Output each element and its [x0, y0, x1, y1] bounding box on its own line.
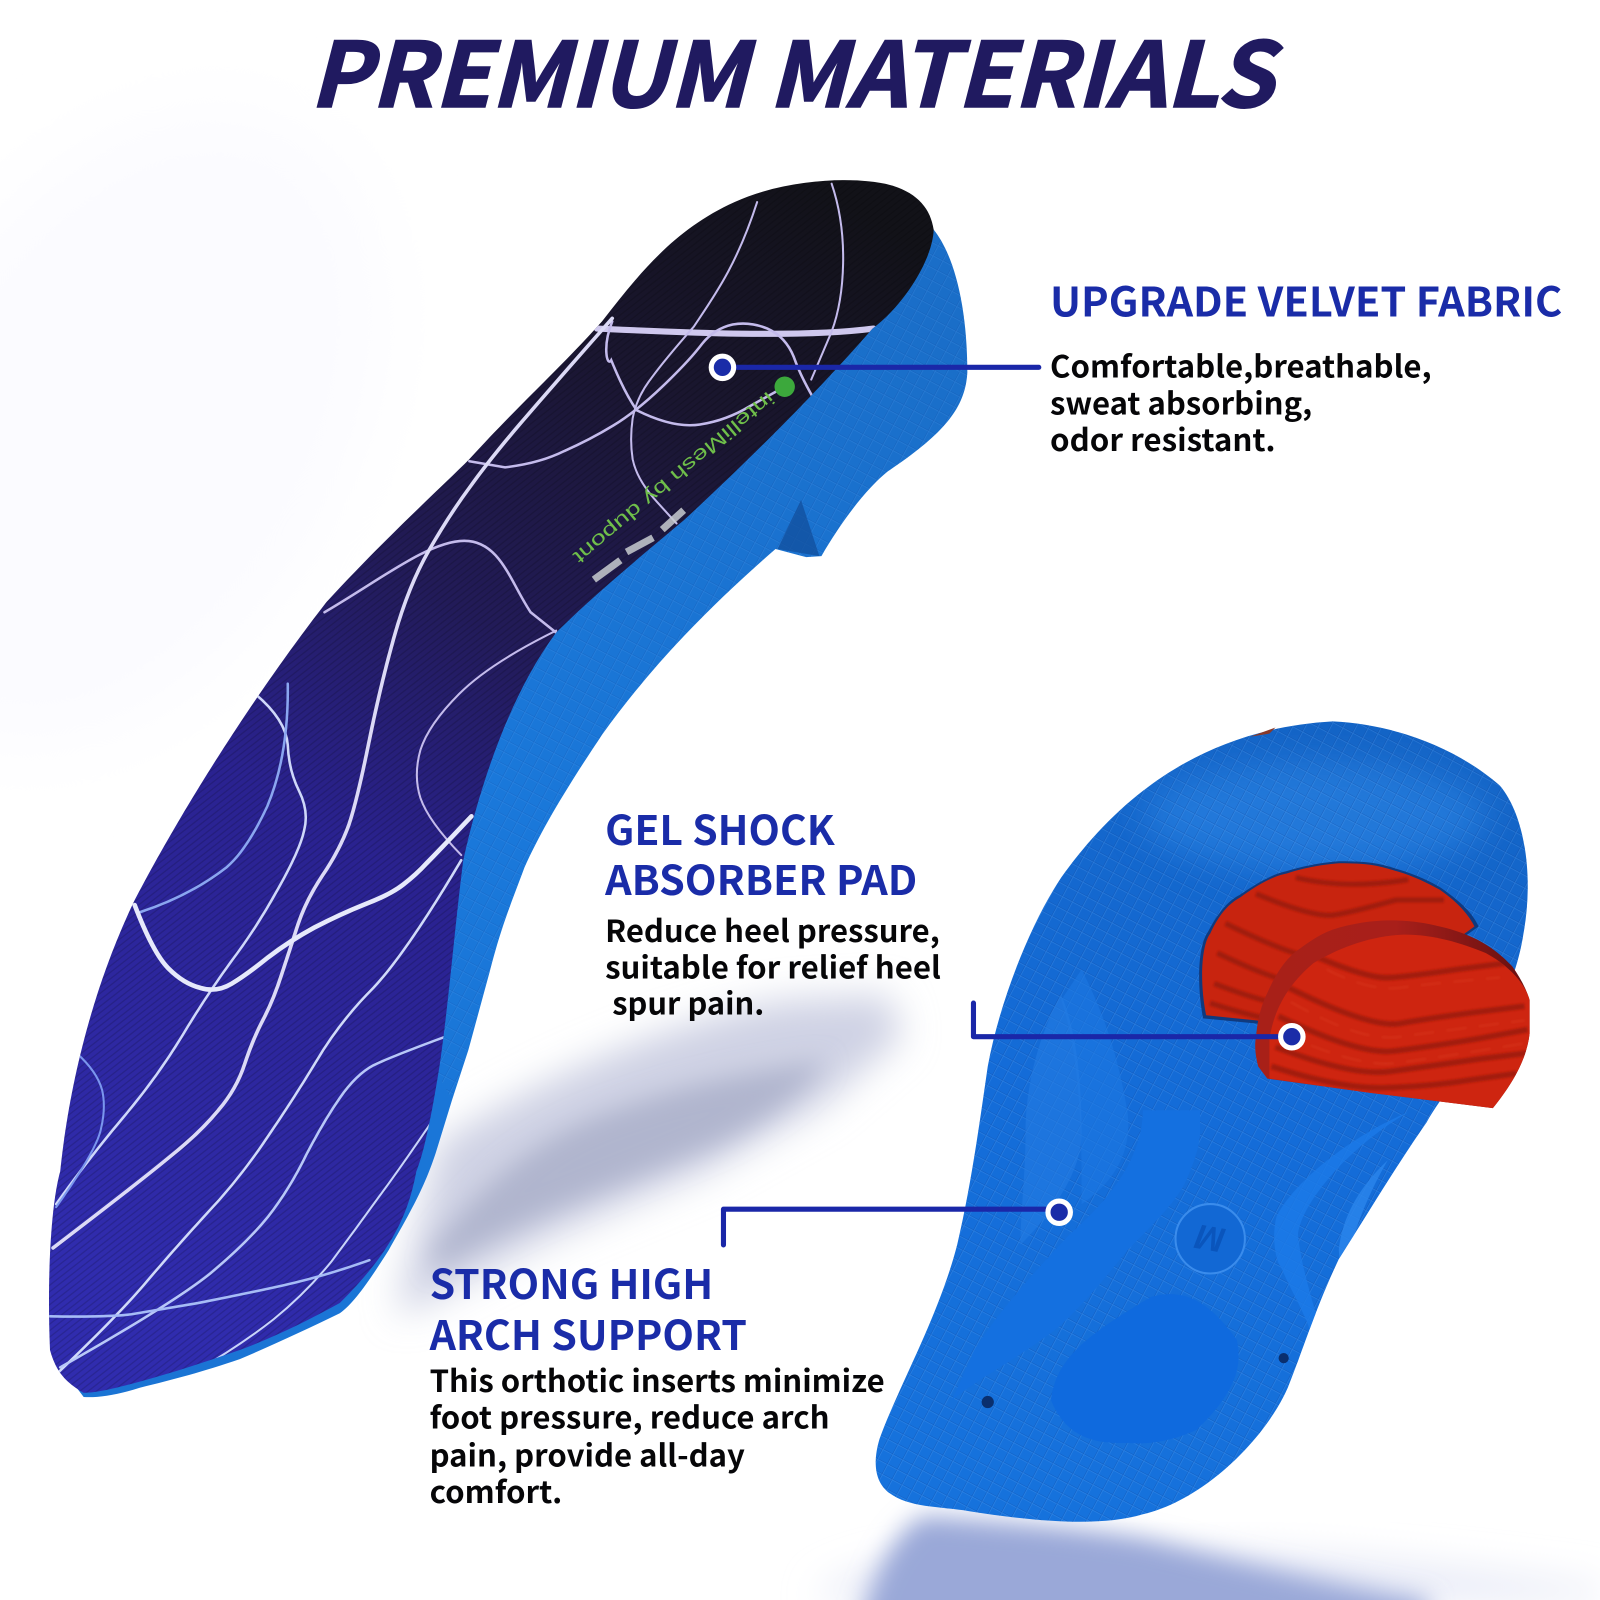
insole blue side wall [61, 230, 967, 1397]
smooth arch band [952, 1110, 1200, 1400]
brand logo [774, 377, 795, 397]
heading: STRONG HIGH [430, 1252, 713, 1311]
description [1050, 342, 1432, 460]
recess shadow [1199, 861, 1479, 1035]
connector line [723, 1209, 1051, 1245]
description [430, 1356, 885, 1512]
front gel pad, lifted [1255, 920, 1530, 1108]
description: spur pain. [612, 978, 764, 1023]
description: suitable for relief heel [605, 943, 941, 988]
top edge mark [1250, 728, 1276, 737]
description: comfort. [430, 1467, 562, 1512]
side wall texture [408, 230, 967, 1100]
left insole: top view with velvet fabric [49, 180, 968, 1398]
description: Comfortable,breathable, [1050, 342, 1432, 387]
description: pain, provide all-day [430, 1430, 745, 1475]
callout: gel shock absorber pad [604, 798, 1303, 1048]
heading: GEL SHOCK [605, 798, 836, 857]
gel pad edge band [1255, 920, 1530, 1108]
rear gel pad [1202, 863, 1474, 1033]
heading: ABSORBER PAD [604, 848, 917, 907]
drain holes [982, 1396, 994, 1408]
gel pad waves [1271, 957, 1528, 1088]
description [605, 906, 941, 1023]
fabric surface [49, 180, 934, 1393]
heel notch shadow [778, 500, 819, 556]
brand mark [594, 510, 684, 580]
arch emblem [1176, 1204, 1245, 1273]
mesh texture and smooth contours [867, 714, 1541, 1531]
marker dot [1048, 1201, 1070, 1223]
heading [429, 1252, 747, 1362]
callout: upgrade velvet fabric [711, 269, 1562, 460]
main long line [53, 318, 612, 1248]
marker dot [711, 356, 734, 379]
description: foot pressure, reduce arch [430, 1393, 830, 1438]
title: PREMIUM MATERIALS [309, 3, 1284, 133]
heading: UPGRADE VELVET FABRIC [1050, 269, 1562, 328]
description: odor resistant. [1050, 415, 1276, 460]
brand text: intelliMesh by dupont [568, 387, 778, 568]
connector line [722, 365, 1039, 370]
lower lines [50, 684, 471, 1374]
marker dot [1281, 1026, 1303, 1048]
arch emblem: M [1192, 1216, 1228, 1259]
description: sweat absorbing, [1050, 378, 1312, 423]
heel cup depression [1051, 1294, 1239, 1443]
heading: ARCH SUPPORT [429, 1303, 747, 1362]
description: This orthotic inserts minimize [430, 1356, 885, 1401]
description: Reduce heel pressure, [605, 906, 940, 951]
connector line [973, 1003, 1292, 1037]
right insole: underside with gel pad [867, 714, 1541, 1531]
blue underside [876, 721, 1528, 1522]
heading [604, 798, 917, 907]
fabric weave and curved lines [49, 180, 930, 1393]
gel pad face [1269, 935, 1530, 1108]
callout: strong high arch support [429, 1201, 1070, 1512]
